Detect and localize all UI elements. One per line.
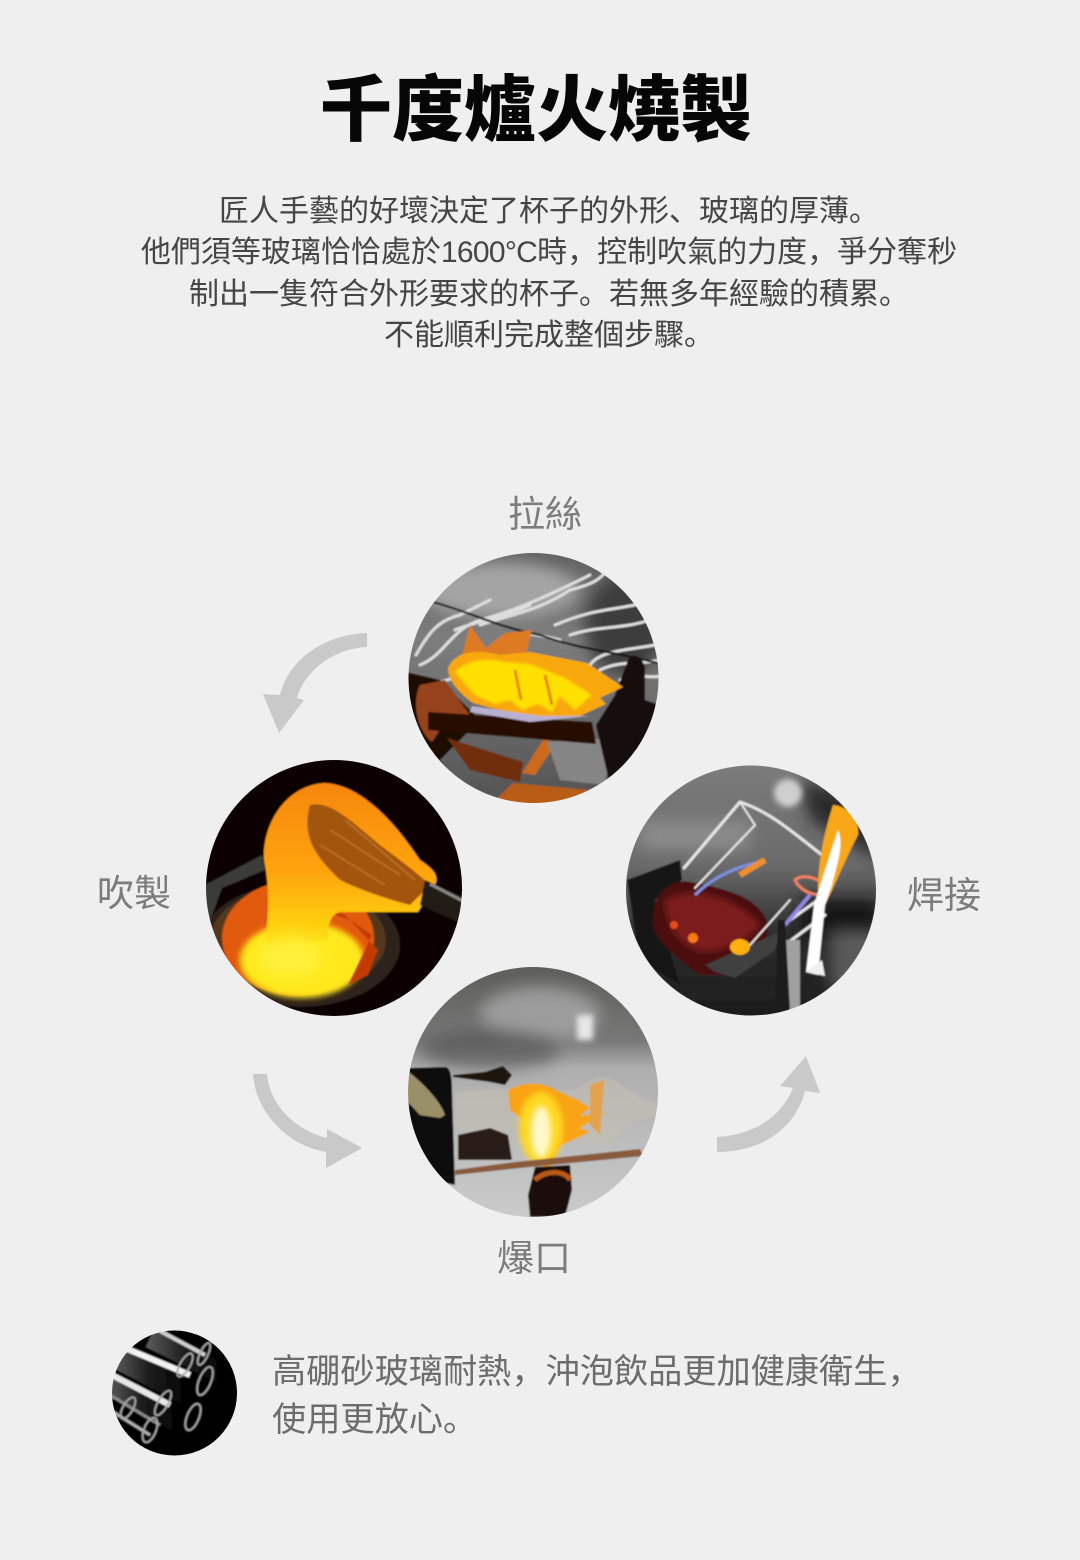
photo: 爆口 flame on glass <box>408 967 658 1217</box>
step label: 爆口: 爆口 <box>497 1238 571 1279</box>
photo: 吹製 molten glass <box>206 760 462 1016</box>
step label: 拉絲: 拉絲 <box>508 494 582 535</box>
footer text: 高硼砂玻璃耐熱，沖泡飲品更加健康衛生， <box>272 1353 922 1391</box>
intro text block: 制出一隻符合外形要求的杯子。若無多年經驗的積累。 <box>189 278 909 311</box>
photo: borosilicate glass tubes <box>112 1330 237 1456</box>
photo: 拉絲 glass drawing over flame <box>408 553 658 803</box>
intro text block: 匠人手藝的好壞決定了杯子的外形、玻璃的厚薄。 <box>219 195 879 228</box>
intro text block: 不能順利完成整個步驟。 <box>384 319 714 352</box>
title: 千度爐火燒製 <box>320 71 752 151</box>
photo: 焊接 glass with flame <box>626 766 876 1016</box>
arrow: 吹製 to 爆口 <box>253 1074 362 1168</box>
step label: 吹製: 吹製 <box>97 873 171 914</box>
footer text: 使用更放心。 <box>272 1400 477 1438</box>
step label: 焊接: 焊接 <box>907 875 981 916</box>
arrow: 爆口 to 焊接 <box>717 1056 820 1152</box>
intro text block: 他們須等玻璃恰恰處於1600°C時，控制吹氣的力度，爭分奪秒 <box>141 236 957 269</box>
intro text block <box>141 195 957 352</box>
arrow: 拉絲 to 吹製 <box>263 633 367 733</box>
footer text <box>272 1353 922 1438</box>
